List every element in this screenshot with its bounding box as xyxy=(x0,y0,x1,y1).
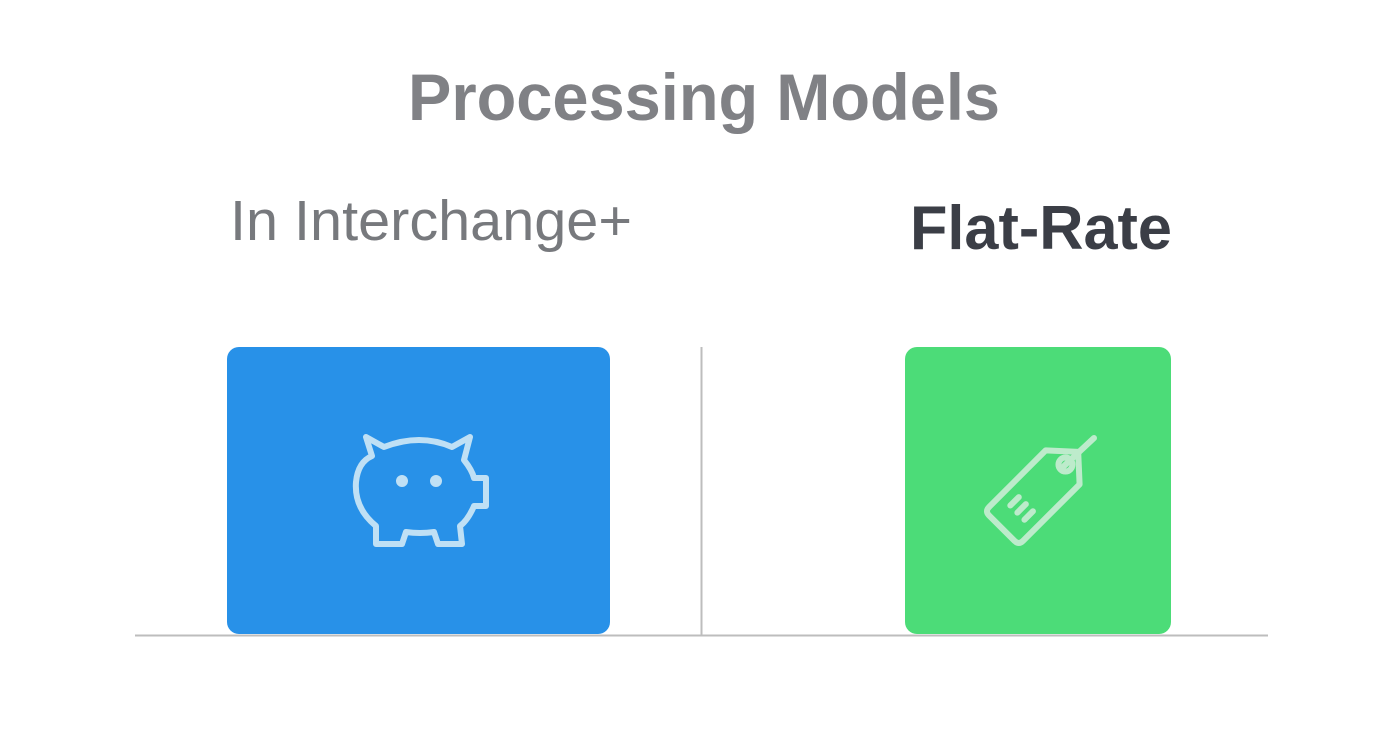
divider xyxy=(700,347,702,635)
heading: In Interchange+: In Interchange+ xyxy=(230,189,632,253)
icon: price tag xyxy=(985,435,1095,545)
baseline axis xyxy=(135,634,1268,636)
heading: Flat-Rate: Flat-Rate xyxy=(910,194,1172,263)
icon: piggy bank xyxy=(356,437,486,544)
panel: interchange+ bar xyxy=(227,347,610,634)
panel: flat-rate bar xyxy=(905,347,1171,634)
title: Processing Models xyxy=(408,60,1000,134)
